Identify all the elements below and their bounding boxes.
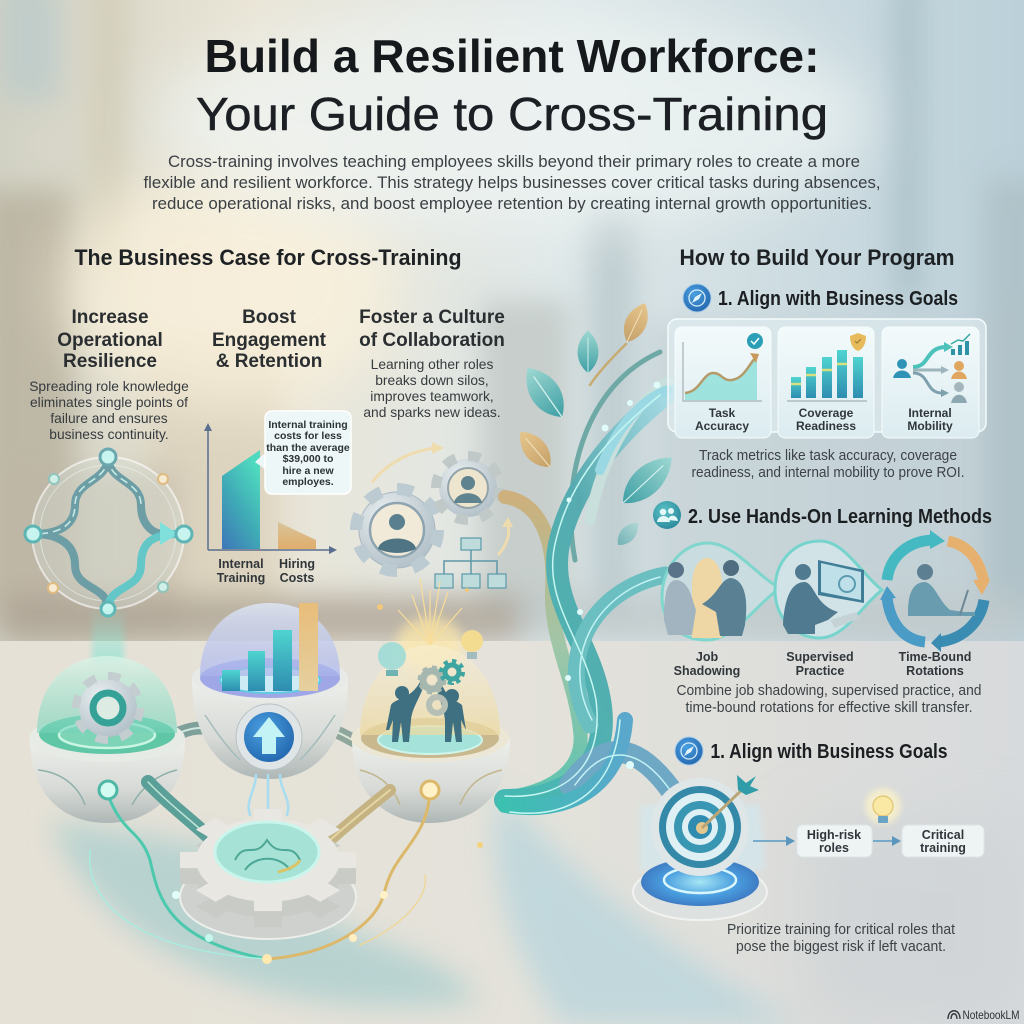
sparks burst <box>377 578 469 673</box>
method: time-bound rotations: Time-Bound <box>899 650 971 664</box>
circuit nodes <box>99 781 483 964</box>
callout: training cost: employes. <box>282 476 334 488</box>
text: combine methods: time-bound rotations for effective skill transfer. <box>686 699 972 716</box>
column: operational resilience <box>29 307 189 442</box>
method: supervised practice: Practice <box>796 664 844 678</box>
column: engagement and retention heading: Engagement <box>212 330 327 351</box>
callout: training cost: costs for less <box>274 430 342 442</box>
icon: collaborating gears and org chart <box>356 442 513 588</box>
card: coverage readiness: Coverage <box>799 406 854 420</box>
leaf: gold top <box>618 299 655 346</box>
icon: light bulb <box>865 788 901 824</box>
box: critical training: training <box>920 841 966 855</box>
title: Your Guide to Cross-Training <box>196 88 828 140</box>
step 1 heading: 1. Align with Business Goals <box>718 287 958 310</box>
text: prioritize training <box>727 921 956 955</box>
tree glow nodes <box>565 382 660 769</box>
icon: bulb right <box>461 630 483 659</box>
intro text <box>144 153 880 213</box>
column: culture of collaboration: breaks down silos, <box>375 373 489 388</box>
method: job shadowing: Shadowing <box>674 664 740 678</box>
icon: up arrow badge <box>236 704 302 770</box>
step 2 heading <box>653 501 992 529</box>
icon: gear in dome <box>76 676 140 740</box>
card: internal mobility <box>882 327 979 438</box>
box: high-risk roles <box>797 825 872 857</box>
method: time-bound rotations <box>880 530 990 678</box>
column: engagement and retention heading <box>212 307 327 372</box>
method: supervised practice: Supervised <box>786 650 854 664</box>
method: job shadowing: Job <box>696 650 718 664</box>
card: task accuracy: Accuracy <box>695 419 749 433</box>
sphere: gold collaboration <box>351 630 510 823</box>
column: culture of collaboration: Learning other roles <box>371 357 493 372</box>
card: task accuracy <box>675 327 771 438</box>
tree of branching circuits <box>505 344 678 813</box>
intro text: Cross-training involves teaching employees skills beyond their primary roles to create a more <box>168 153 860 171</box>
step 3 heading: 1. Align with Business Goals <box>710 740 948 763</box>
heading: how to build: How to Build Your Program <box>680 245 954 270</box>
panel: metrics <box>668 319 986 438</box>
box: critical training <box>902 825 984 857</box>
column: culture of collaboration <box>359 307 505 420</box>
text: prioritize training: Prioritize training for critical roles that <box>727 921 956 938</box>
connectors between spheres <box>175 728 362 745</box>
text: prioritize training: pose the biggest risk if left vacant. <box>736 938 946 955</box>
intro text: reduce operational risks, and boost employee retention by creating internal growth opportunities. <box>152 195 872 213</box>
step 1 heading <box>683 284 958 312</box>
column: operational resilience: Increase <box>71 307 149 328</box>
callout: training cost: hire a new <box>282 465 335 477</box>
title <box>196 30 828 140</box>
text: combine methods: Combine job shadowing, supervised practice, and <box>676 682 982 699</box>
bar chart: internal training vs hiring costs: Internal <box>218 557 264 571</box>
card: internal mobility: Mobility <box>907 419 953 433</box>
column: operational resilience: failure and ensures <box>50 411 168 426</box>
text: track metrics: readiness, and internal mobility to prove ROI. <box>692 464 964 481</box>
callout: training cost: than the average <box>266 442 350 454</box>
method: supervised practice <box>775 541 882 678</box>
card: coverage readiness: Readiness <box>796 419 856 433</box>
column: engagement and retention heading: & Retention <box>216 351 322 372</box>
icon: bulb left <box>378 642 406 676</box>
text: track metrics <box>692 447 964 481</box>
column: operational resilience: Spreading role knowledge <box>29 379 189 394</box>
step 3 heading <box>675 737 948 765</box>
bar chart: internal training vs hiring costs: Training <box>217 571 265 585</box>
heading: business case: The Business Case for Cross-Training <box>74 245 462 270</box>
box: critical training: Critical <box>922 828 964 842</box>
method: job shadowing <box>662 543 780 678</box>
column: operational resilience: Operational <box>57 330 163 351</box>
column: culture of collaboration: and sparks new ideas. <box>363 405 501 420</box>
column: operational resilience: business continuity. <box>49 427 169 442</box>
circuit lines to central gear <box>90 775 430 959</box>
column: engagement and retention heading: Boost <box>242 307 297 328</box>
figures raising gears <box>386 661 466 742</box>
text: combine methods <box>676 682 982 716</box>
leaf: teal top <box>578 330 598 373</box>
callout: training cost: Internal training <box>268 419 348 431</box>
leaf: teal right <box>613 447 681 513</box>
icon: target on glowing platform <box>633 775 767 920</box>
step 2 heading: 2. Use Hands-On Learning Methods <box>688 505 992 528</box>
method: time-bound rotations: Rotations <box>906 664 964 678</box>
title: Build a Resilient Workforce: <box>204 30 820 82</box>
card: coverage readiness <box>778 327 874 438</box>
bar chart: internal training vs hiring costs: Hiring <box>279 557 315 571</box>
box: high-risk roles: High-risk <box>807 828 861 842</box>
intro text: flexible and resilient workforce. This strategy helps businesses cover critical tasks during absences, <box>144 174 880 192</box>
card: internal mobility: Internal <box>908 406 952 420</box>
sphere: blue engagement <box>192 603 348 779</box>
bar chart: internal training vs hiring costs <box>204 423 337 585</box>
callout: training cost: $39,000 to <box>283 453 333 465</box>
arrow: roles to training <box>873 836 901 846</box>
callout: training cost <box>255 411 351 494</box>
column: operational resilience: eliminates single points of <box>30 395 188 410</box>
arrow: target to high-risk roles <box>753 836 795 846</box>
icon: resilience network loop <box>25 449 192 616</box>
column: culture of collaboration: Foster a Culture <box>359 307 505 328</box>
glow beam to resilience sphere <box>92 612 124 662</box>
central gear hub <box>180 809 356 939</box>
text: track metrics: Track metrics like task accuracy, coverage <box>699 447 957 464</box>
column: operational resilience: Resilience <box>63 351 157 372</box>
box: high-risk roles: roles <box>819 841 849 855</box>
column: culture of collaboration: of Collaboration <box>359 330 505 351</box>
leaf: teal large left <box>516 360 574 425</box>
leaf: gold left <box>512 425 559 474</box>
bar chart: internal training vs hiring costs: Costs <box>280 571 314 585</box>
column: culture of collaboration: improves teamwork, <box>370 389 494 404</box>
card: task accuracy: Task <box>709 406 736 420</box>
sphere: teal resilience <box>29 656 185 823</box>
leaf: pale small <box>613 518 643 550</box>
